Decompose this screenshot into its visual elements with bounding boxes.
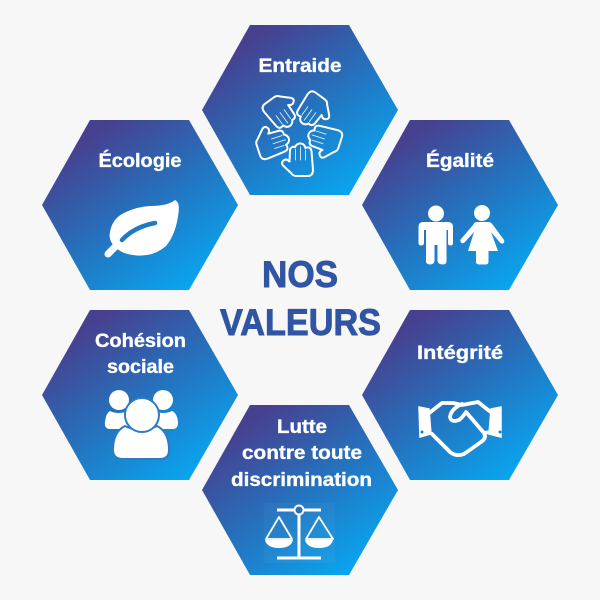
heading: Cohésion sociale: sociale (107, 357, 174, 378)
title: NOS VALEURS: NOS (262, 254, 338, 295)
icon: scales of justice (264, 503, 335, 563)
panel: Entraide (202, 25, 398, 195)
icon: man and woman (418, 205, 504, 264)
panel: Lutte contre toute discrimination (202, 405, 398, 575)
heading: Écologie: Écologie (98, 150, 182, 172)
heading: Cohésion sociale: Cohésion (95, 331, 186, 352)
title: NOS VALEURS: VALEURS (220, 302, 381, 343)
icon: group of people (105, 390, 178, 459)
panel: Cohésion sociale (42, 310, 238, 480)
panel: Intégrité (362, 310, 558, 480)
heading: Intégrité: Intégrité (417, 343, 503, 364)
panel: Écologie (42, 120, 238, 290)
heading: Lutte contre toute discrimination: contre toute (242, 443, 362, 464)
panel: Égalité (362, 120, 558, 290)
icon: leaf (108, 200, 179, 256)
heading: Lutte contre toute discrimination: Lutte (277, 417, 327, 438)
heading: Lutte contre toute discrimination (231, 417, 372, 491)
heading: Cohésion sociale (95, 331, 186, 378)
icon: five hands (252, 89, 344, 176)
icon: handshake (419, 402, 502, 455)
heading: Égalité: Égalité (426, 150, 494, 172)
heading: Entraide: Entraide (258, 56, 342, 77)
heading: Lutte contre toute discrimination: discrimination (231, 470, 372, 491)
title: NOS VALEURS (220, 254, 381, 343)
